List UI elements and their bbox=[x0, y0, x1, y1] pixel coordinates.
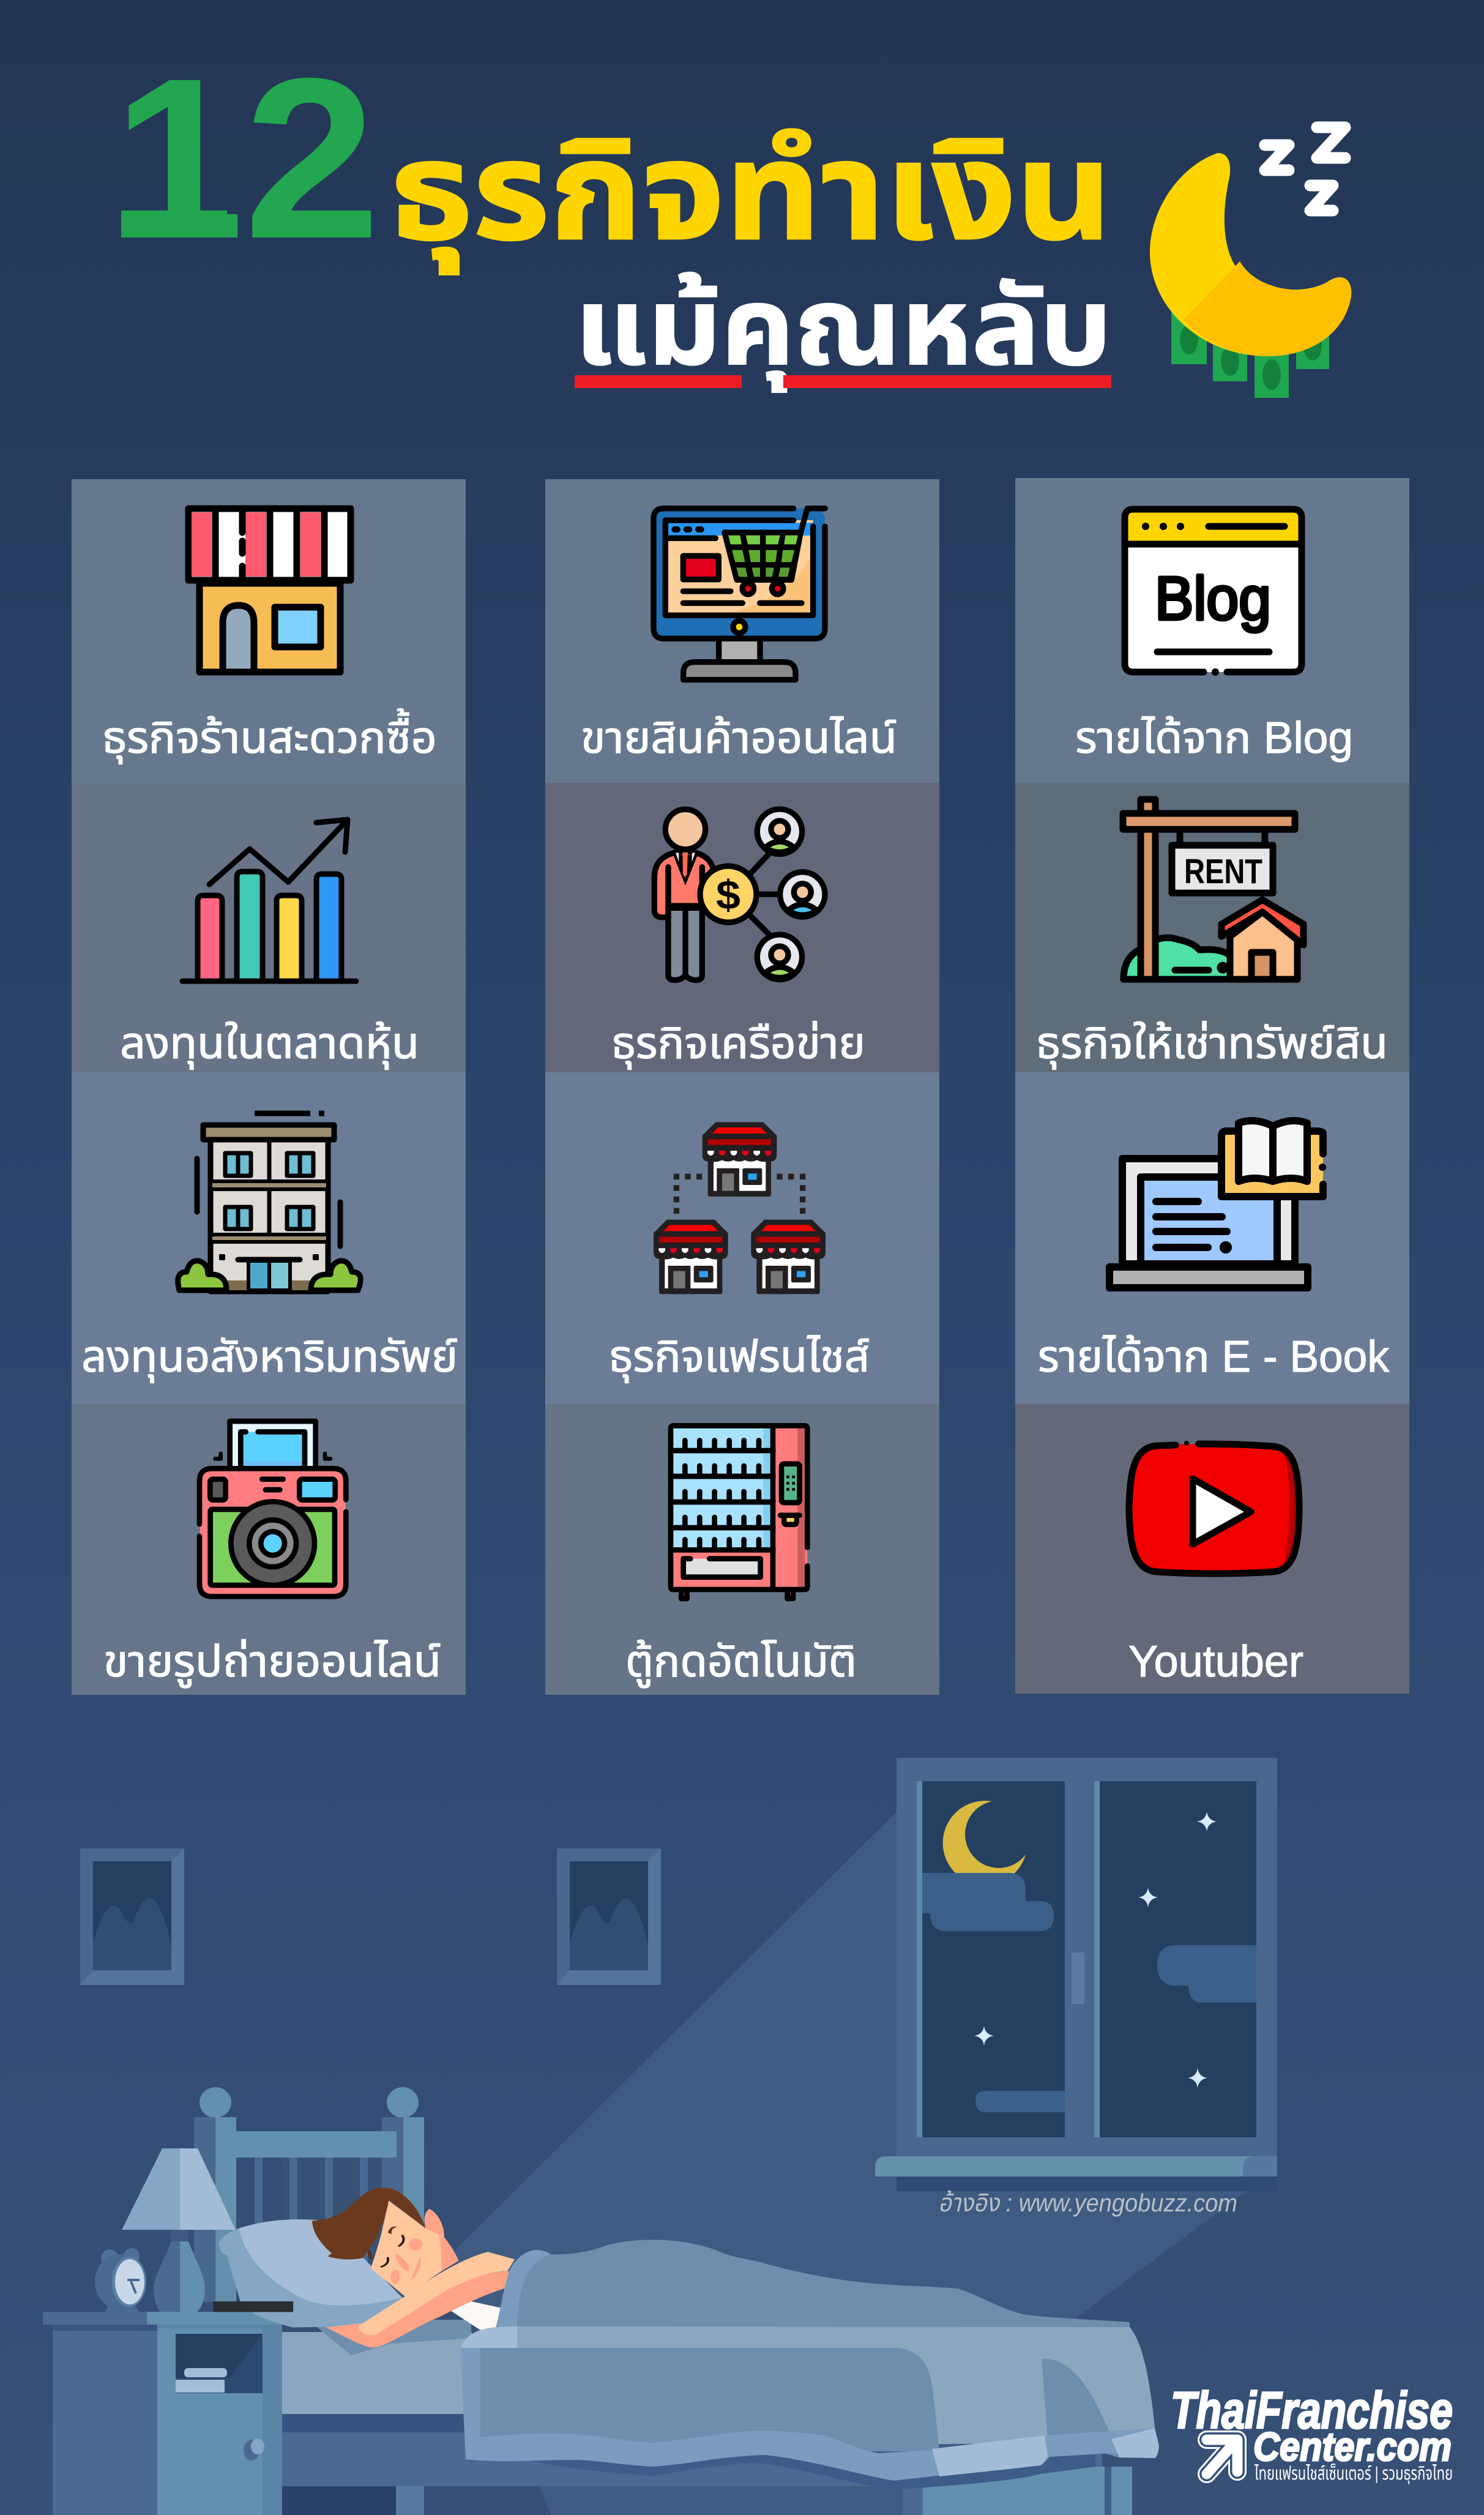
icon: rising bar chart bbox=[182, 820, 356, 981]
window sill bbox=[875, 2156, 1277, 2177]
pillow bbox=[218, 2219, 403, 2328]
picture frame right bbox=[557, 1848, 661, 1985]
reference text: อ้างอิง : www.yengobuzz.com bbox=[938, 2189, 1237, 2217]
stars bbox=[974, 1812, 1217, 2088]
alarm clock bbox=[95, 2248, 146, 2312]
bed headboard bbox=[194, 2087, 424, 2304]
picture frame left bbox=[80, 1848, 184, 1985]
pillow and sleeping man bbox=[213, 2188, 515, 2347]
bed frame and mattress bbox=[282, 2320, 1132, 2515]
panel: stock market bbox=[72, 783, 466, 1072]
bedroom illustration bbox=[43, 1758, 1277, 2515]
clouds bbox=[922, 1873, 1256, 2112]
label: ลงทุนอสังหาริมทรัพย์ bbox=[81, 1332, 458, 1383]
label: รายได้จาก E - Book bbox=[1038, 1332, 1390, 1381]
icon text: Blog bbox=[1155, 564, 1271, 633]
shirt bbox=[451, 2301, 502, 2332]
panel: e-book income bbox=[1015, 1072, 1409, 1404]
moonlight beam bbox=[453, 1812, 1277, 2515]
panel: real estate bbox=[72, 1072, 466, 1404]
panel: vending machine bbox=[545, 1404, 939, 1695]
title line two: แม้คุณหลับ bbox=[575, 266, 1112, 392]
nightstand bbox=[43, 2312, 293, 2515]
table lamp bbox=[122, 2148, 236, 2312]
icon text: RENT bbox=[1184, 852, 1262, 891]
panel: blog income bbox=[1015, 478, 1409, 783]
icon: laptop and book bbox=[1109, 1121, 1326, 1288]
icon: rent sign and house bbox=[1123, 799, 1303, 979]
icon: network person with dollar: $ bbox=[716, 873, 740, 918]
logo arrow bbox=[1207, 2440, 1237, 2474]
lower arm bbox=[326, 2271, 512, 2347]
logo: ThaiFranchise Center bbox=[1171, 2382, 1453, 2484]
label: ลงทุนในตลาดหุ้น bbox=[120, 1019, 419, 1070]
title underline bbox=[575, 375, 1111, 388]
icon: instant camera bbox=[199, 1421, 346, 1596]
label: รายได้จาก Blog bbox=[1075, 714, 1353, 763]
icon: franchise shops network bbox=[654, 1122, 826, 1294]
panel: rental property bbox=[1015, 783, 1409, 1072]
label: Youtuber bbox=[1128, 1637, 1303, 1686]
panel: network business bbox=[545, 783, 939, 1072]
icon: computer with shopping cart bbox=[654, 509, 825, 680]
moon bbox=[1150, 153, 1351, 356]
black book bbox=[213, 2301, 293, 2312]
icon: vending machine bbox=[671, 1426, 807, 1599]
title number 12: 12 bbox=[113, 31, 376, 286]
label: ขายรูปถ่ายออนไลน์ bbox=[103, 1637, 441, 1688]
logo: ThaiFranchise Center: Center.com bbox=[1253, 2424, 1452, 2469]
icon: youtube play button bbox=[1129, 1441, 1299, 1574]
head bbox=[371, 2200, 458, 2296]
cheeks and nose bbox=[391, 2238, 422, 2284]
label: ขายสินค้าออนไลน์ bbox=[581, 714, 897, 763]
icon: blog window bbox=[1125, 509, 1302, 676]
window bbox=[875, 1758, 1277, 2191]
label: ธุรกิจให้เช่าทรัพย์สิน bbox=[1036, 1019, 1388, 1070]
icon: apartment building bbox=[178, 1113, 360, 1291]
shoulder and upper arm bbox=[359, 2252, 515, 2336]
title line one: ธุรกิจทำเงิน bbox=[390, 115, 1112, 275]
panel: online selling bbox=[545, 479, 939, 783]
panel: convenience store bbox=[72, 479, 466, 783]
money bills bbox=[1171, 306, 1329, 398]
zzz bbox=[1265, 127, 1345, 211]
panel: selling photos bbox=[72, 1404, 466, 1695]
label: ธุรกิจเครือข่าย bbox=[611, 1019, 865, 1070]
label: ธุรกิจแฟรนไชส์ bbox=[609, 1332, 870, 1383]
icon: network person with dollar bbox=[654, 809, 825, 980]
hair bbox=[312, 2188, 425, 2259]
icon: store bbox=[188, 509, 351, 672]
eyes bbox=[381, 2235, 404, 2266]
icon: sleeping moon with money bbox=[1150, 127, 1351, 398]
panel: franchise bbox=[545, 1072, 939, 1404]
moon in window bbox=[943, 1801, 1026, 1885]
title bbox=[113, 31, 1112, 392]
panel: youtuber bbox=[1015, 1404, 1409, 1694]
label: ตู้กดอัตโนมัติ bbox=[625, 1637, 857, 1688]
label: ธุรกิจร้านสะดวกซื้อ bbox=[102, 708, 437, 764]
blanket bbox=[461, 2240, 1159, 2490]
